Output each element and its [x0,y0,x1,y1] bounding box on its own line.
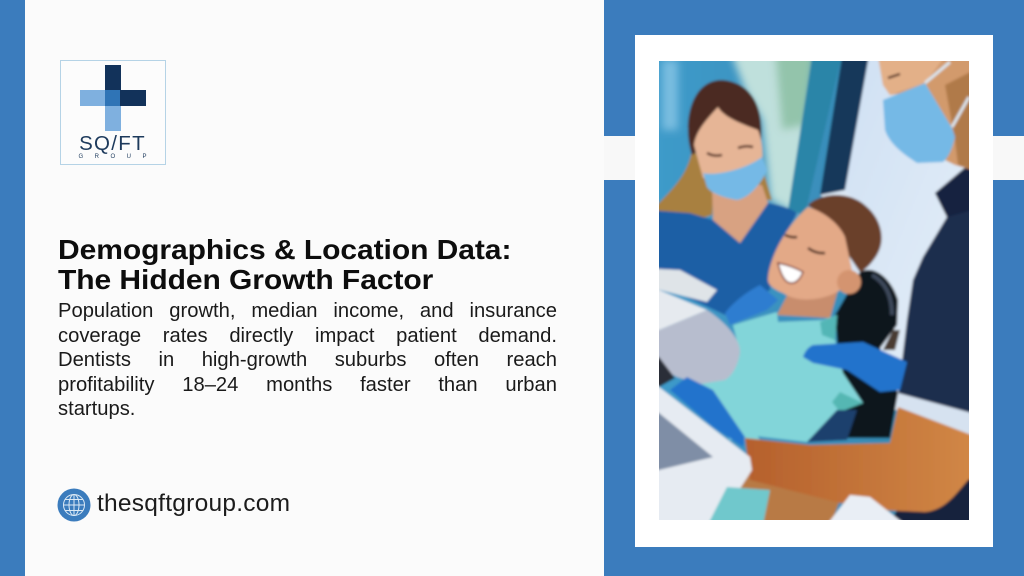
logo wordmark: SQ/FT [79,132,146,155]
body text: Population growth, median income, and insurance [58,300,557,322]
doctor mask [883,83,955,163]
nurse face [694,107,762,182]
nurse neck [712,185,768,243]
body text [58,300,557,420]
boy smile [778,263,803,283]
nurse eyes [707,146,753,156]
nurse mask [703,157,767,200]
nurse hair back [650,150,772,222]
logo cross icon [80,65,146,131]
photo: dentist and smiling boy [659,61,969,520]
mirror [640,310,740,384]
logo [60,60,166,165]
white horizontal strip [604,136,1024,180]
title: The Hidden Growth Factor [58,264,433,295]
door frame [788,50,843,215]
boy eyes [785,235,825,253]
boy ear [837,270,861,294]
body text: profitability 18–24 months faster than urban [58,374,557,396]
body text: startups. [58,398,135,420]
nurse scrubs [650,203,797,315]
nurse glove [725,285,778,325]
icon: globe [58,488,90,522]
bib [713,312,863,442]
boy face [768,207,852,299]
body text: Dentists in high-growth suburbs often reach [58,349,557,371]
body text: coverage rates directly impact patient demand. [58,324,557,346]
doctor eye [888,74,900,78]
doctor shirt [898,160,990,420]
boy neck [777,290,838,318]
left blue bar [0,0,25,576]
title [58,234,511,295]
doctor sleeve [898,393,990,442]
nurse hair [688,80,761,155]
window [662,50,815,215]
foreground white object [815,495,925,540]
website url: thesqftgroup.com [97,490,290,517]
panel: left content background [25,0,604,576]
wall [845,50,990,410]
doctor face [877,50,990,175]
mirror rim [640,288,707,330]
logo subtitle: GROUP [78,154,158,160]
doctor arm [745,407,990,512]
panel: right blue background [604,0,1024,576]
title: Demographics & Location Data: [58,234,511,265]
tablet [640,375,752,540]
area under bib [690,380,760,440]
dark area below arm [880,470,990,540]
chair [835,270,898,438]
background [640,40,990,540]
bib lower [700,487,770,540]
boy hair [808,195,882,272]
doctor glove lower [670,377,745,447]
photo frame [635,35,993,547]
mirror teeth model [640,268,717,302]
doctor glove on bib [803,342,907,392]
boy clothing [807,410,857,442]
